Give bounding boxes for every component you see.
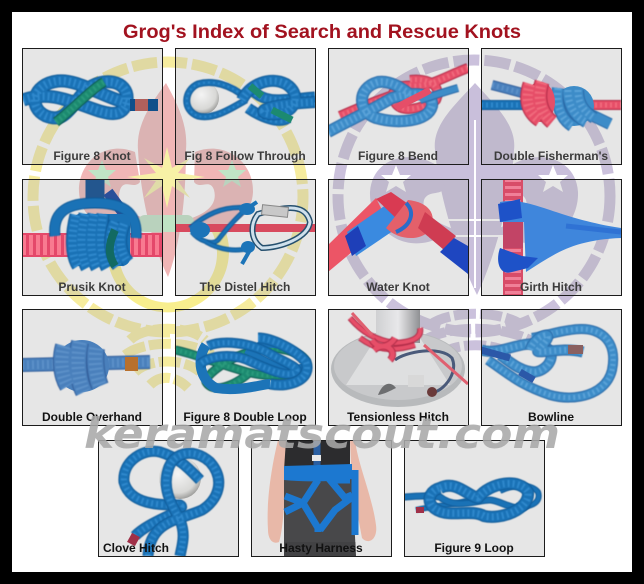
panel: Prusik Knot <box>22 179 162 296</box>
panel: Prusik Knot: Prusik Knot <box>58 280 126 294</box>
panel: Figure 8 Double Loop <box>175 309 316 426</box>
watermark: yellow and pink scout emblem <box>33 62 303 388</box>
panel: Water Knot: Water Knot <box>366 280 430 294</box>
panel: Figure 9 Loop: Figure 9 Loop <box>434 541 514 555</box>
panel: Double Fisherman's: Double Fisherman's <box>494 149 608 163</box>
panel: Tensionless Hitch: Tensionless Hitch <box>347 410 449 424</box>
panel: Double Overhand <box>22 309 162 426</box>
panel: Figure 8 Bend <box>328 48 468 164</box>
panel: Figure 8 Knot <box>22 48 162 164</box>
panel: Clove Hitch <box>98 440 238 556</box>
panel: Water Knot <box>328 179 468 296</box>
panel: Bowline: Bowline <box>528 410 574 424</box>
panel: Fig 8 Follow Through <box>175 48 316 164</box>
panel: The Distel Hitch: The Distel Hitch <box>200 280 290 294</box>
panel: Tensionless Hitch <box>328 309 468 426</box>
panel: The Distel Hitch <box>175 179 316 296</box>
panel: Fig 8 Follow Through: Fig 8 Follow Through <box>184 149 306 163</box>
panel: Figure 9 Loop <box>404 440 544 556</box>
panel: Figure 8 Knot: Figure 8 Knot <box>53 149 131 163</box>
title: Grog's Index of Search and Rescue Knots <box>123 21 521 43</box>
panel: Double Overhand: Double Overhand <box>42 410 142 424</box>
panel: Double Fisherman's <box>481 48 622 164</box>
panel: Clove Hitch: Clove Hitch <box>103 541 169 555</box>
watermark text: keramatscout.com <box>84 409 560 458</box>
watermark: purple scout emblem <box>338 60 610 355</box>
panel: Figure 8 Double Loop: Figure 8 Double Loop <box>183 410 307 424</box>
panel: Hasty Harness: Hasty Harness <box>279 541 363 555</box>
panel: Hasty Harness <box>251 440 392 556</box>
panel: Bowline <box>481 309 622 426</box>
panel: Girth Hitch <box>481 179 622 296</box>
panel: Figure 8 Bend: Figure 8 Bend <box>358 149 438 163</box>
panel: Girth Hitch: Girth Hitch <box>520 280 582 294</box>
